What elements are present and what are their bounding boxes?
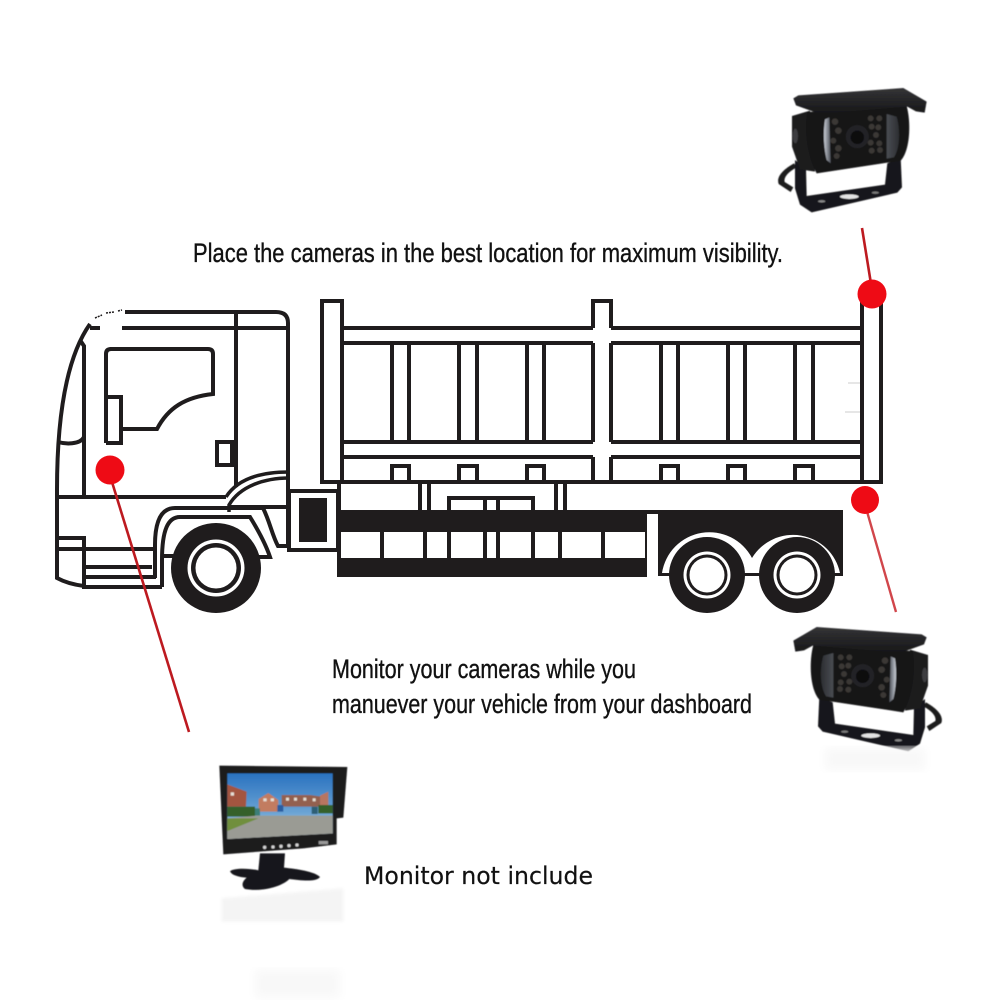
- icon: bottom camera: [793, 627, 942, 751]
- text block: monitor your cameras: Monitor your cameras while you: [332, 654, 636, 684]
- front wheel: [171, 523, 261, 613]
- monitor reflection: [222, 888, 343, 922]
- connector line: monitor to cab: [112, 482, 189, 732]
- dump bed: [322, 298, 883, 482]
- icon: top camera: [778, 88, 927, 212]
- chassis: [337, 482, 658, 577]
- faint reflection smudge: [255, 970, 340, 998]
- connector line: bottom camera: [866, 508, 896, 612]
- connector line: top camera: [862, 228, 872, 290]
- caption: monitor not included: Monitor not include: [364, 862, 593, 890]
- red dot: bottom rear: [851, 486, 879, 514]
- truck cab outline: [57, 312, 289, 587]
- bottom camera reflection: [825, 748, 925, 770]
- heading: camera placement: Place the cameras in the best location for maximum visibility.: [193, 238, 783, 268]
- rear wheel 1: [669, 537, 745, 613]
- rear mudguard: [658, 510, 843, 576]
- monitor buttons: [263, 843, 299, 849]
- monitor screen: [227, 773, 333, 839]
- wheel arch fender: [155, 508, 289, 587]
- grille box: [289, 491, 338, 550]
- text block: monitor your cameras: manuever your vehicle from your dashboard: [332, 689, 752, 719]
- red dot: top rear: [858, 280, 886, 308]
- rear wheel 2: [759, 537, 835, 613]
- monitor housing: [219, 766, 347, 854]
- truck line drawing: [57, 298, 883, 613]
- text block: monitor your cameras: [332, 654, 752, 719]
- icon: monitor: [219, 766, 347, 922]
- red dot: cab: [96, 456, 124, 484]
- monitor stand: [230, 853, 320, 890]
